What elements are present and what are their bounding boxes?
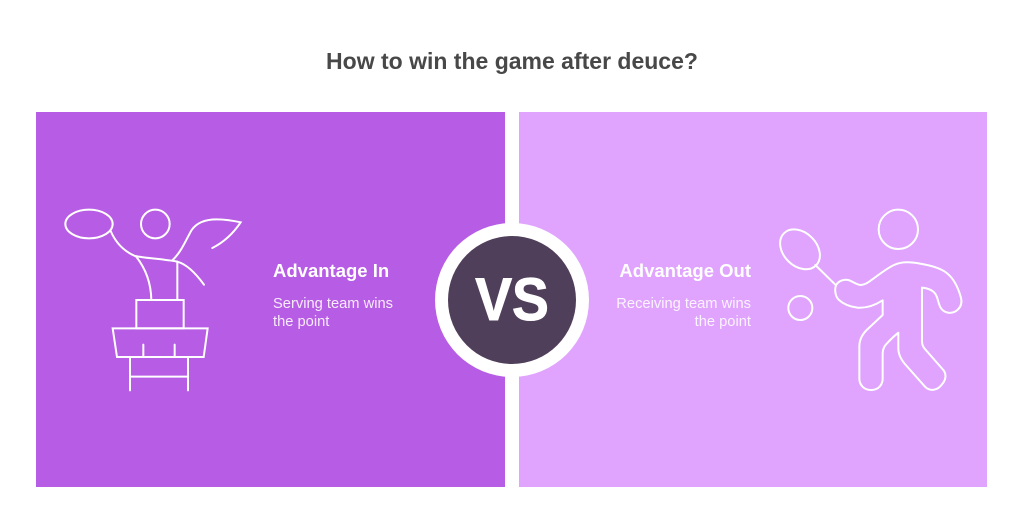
- panel: advantage out: [519, 112, 987, 487]
- vs inner circle: [448, 236, 576, 364]
- heading: advantage in: Advantage In: [273, 260, 389, 281]
- vs inner circle: VS: [475, 266, 549, 333]
- vs badge: [435, 223, 589, 377]
- text: advantage in description: the point: [273, 314, 329, 330]
- icon: tennis umpire on chair: [64, 208, 242, 392]
- text: advantage out description: Receiving team wins: [616, 296, 751, 312]
- title: How to win the game after deuce?: [326, 48, 698, 74]
- text: advantage out description: [616, 296, 751, 330]
- text: advantage in description: [273, 296, 393, 330]
- icon: badminton player: [779, 208, 962, 391]
- heading: advantage out: Advantage Out: [619, 260, 751, 281]
- text: advantage in description: Serving team wins: [273, 296, 393, 312]
- text: advantage out description: the point: [695, 314, 751, 330]
- panel: advantage in: [36, 112, 505, 487]
